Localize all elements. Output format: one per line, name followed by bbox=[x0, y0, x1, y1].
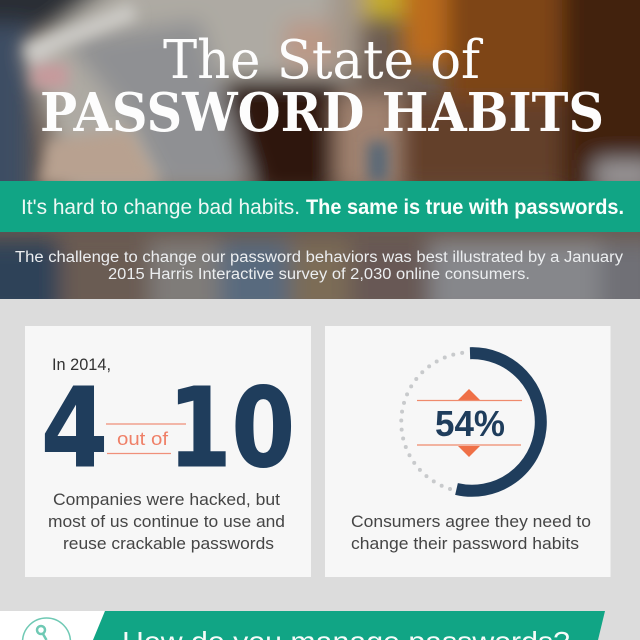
intro text: The challenge to change our password behaviors was best illustrated by a January bbox=[15, 249, 623, 266]
caption: Companies were hacked, but bbox=[53, 491, 280, 509]
up triangle bbox=[458, 389, 480, 400]
intro year: In 2014, bbox=[52, 355, 111, 374]
panel: 4 out of 10 bbox=[25, 326, 311, 577]
percent value: 54% bbox=[435, 403, 505, 444]
down triangle bbox=[458, 446, 480, 457]
teal banner: It's hard to change bad habits. bbox=[21, 196, 300, 219]
caption: most of us continue to use and bbox=[48, 513, 285, 531]
section header bar bbox=[0, 611, 605, 640]
percent rules bbox=[417, 400, 522, 445]
icon: key in circle bbox=[22, 618, 70, 640]
teal banner: The same is true with passwords. bbox=[306, 196, 624, 219]
title: PASSWORD HABITS bbox=[40, 82, 604, 144]
title: The State of bbox=[163, 30, 483, 91]
caption bbox=[351, 513, 591, 553]
caption: Consumers agree they need to bbox=[351, 513, 591, 531]
big number four: 4 bbox=[41, 364, 108, 492]
donut chart bbox=[401, 352, 541, 491]
caption bbox=[48, 491, 285, 553]
hero photo background bbox=[0, 0, 640, 320]
panel: 54 percent bbox=[325, 326, 610, 577]
out of label: out of bbox=[117, 429, 169, 449]
caption: reuse crackable passwords bbox=[63, 535, 274, 553]
title bbox=[40, 30, 604, 144]
teal banner bbox=[0, 181, 640, 232]
big number ten: 10 bbox=[168, 364, 295, 492]
intro text: 2015 Harris Interactive survey of 2,030 online consumers. bbox=[108, 266, 530, 283]
caption: change their password habits bbox=[351, 535, 579, 553]
intro text bbox=[15, 249, 623, 283]
out of label bbox=[106, 424, 186, 454]
